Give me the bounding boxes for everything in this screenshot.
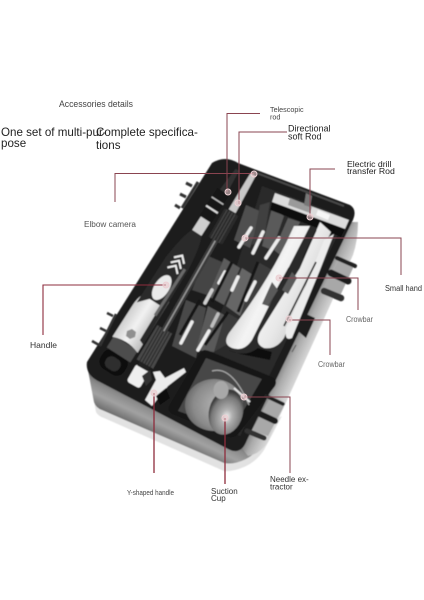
callout: directional soft rod xyxy=(235,124,331,206)
callout: crowbar lower: Crowbar xyxy=(318,360,345,369)
text: one set of multi-purpose: pose xyxy=(1,137,26,150)
tray floor xyxy=(180,186,344,436)
text: one set of multi-purpose: One set of multi-pur- xyxy=(1,126,107,139)
case right wall xyxy=(240,222,358,456)
callout: crowbar upper xyxy=(276,275,373,324)
suction cup bin xyxy=(168,350,276,439)
tool case xyxy=(87,159,358,471)
handle hex hole xyxy=(126,329,136,339)
callout: directional soft rod: soft Rod xyxy=(288,132,322,142)
right wall recess xyxy=(298,314,315,338)
callout: handle: Handle xyxy=(30,340,57,350)
bit holders xyxy=(172,202,300,358)
callout: elbow camera xyxy=(84,171,257,229)
glass bulb xyxy=(204,385,248,439)
tray lip xyxy=(254,172,344,206)
tray interior xyxy=(87,159,355,451)
callout: electric drill transfer rod xyxy=(307,159,395,220)
callout: crowbar upper: Crowbar xyxy=(346,315,373,324)
callout: telescopic rod: Telescopic xyxy=(270,105,304,114)
callout: Y-shaped handle xyxy=(127,390,174,497)
lower right latch xyxy=(247,396,284,438)
callout: handle xyxy=(30,282,169,350)
callout: crowbar lower xyxy=(286,316,345,369)
text: complete specifications: tions xyxy=(96,139,121,152)
callout: small hand xyxy=(242,235,422,293)
callout: Y-shaped handle: Y-shaped handle xyxy=(127,490,174,497)
middle crowbar xyxy=(258,222,331,348)
upper left hinge xyxy=(175,182,198,208)
text: complete specifications: Complete specifica- xyxy=(96,126,198,139)
large spatula xyxy=(226,226,310,349)
callout: electric drill transfer rod: transfer Rod xyxy=(347,166,395,176)
callout: small hand: Small hand xyxy=(385,284,422,293)
bits xyxy=(181,228,279,350)
suction disc xyxy=(185,379,243,431)
callout: elbow camera: Elbow camera xyxy=(84,220,137,229)
case front wall xyxy=(87,365,262,464)
callout: suction cup: Suction xyxy=(211,487,238,496)
cup neck xyxy=(214,381,228,399)
callout: telescopic rod xyxy=(225,105,304,195)
narrow crowbar xyxy=(286,234,334,339)
callout: electric drill transfer rod: Electric drill xyxy=(347,159,391,169)
upper right latch xyxy=(324,258,355,298)
heading: accessories details: Accessories details xyxy=(59,99,133,109)
callout: needle extractor: Needle ex- xyxy=(270,475,309,484)
electric drill transfer rod xyxy=(270,193,349,237)
callout: suction cup xyxy=(211,415,238,503)
crowbars xyxy=(226,222,334,360)
callout: telescopic rod: rod xyxy=(270,112,280,122)
callout: needle extractor xyxy=(241,394,309,492)
needle extractor xyxy=(212,370,249,405)
case bottom rim xyxy=(90,380,282,471)
screwdriver handle xyxy=(95,162,250,380)
callout: directional soft rod: Directional xyxy=(288,124,331,134)
knurled rod xyxy=(125,170,261,390)
callout: needle extractor: tractor xyxy=(270,482,293,492)
Y-shaped handle xyxy=(142,368,186,406)
lower left hinge xyxy=(92,313,116,346)
callout: suction cup: Cup xyxy=(211,494,226,503)
